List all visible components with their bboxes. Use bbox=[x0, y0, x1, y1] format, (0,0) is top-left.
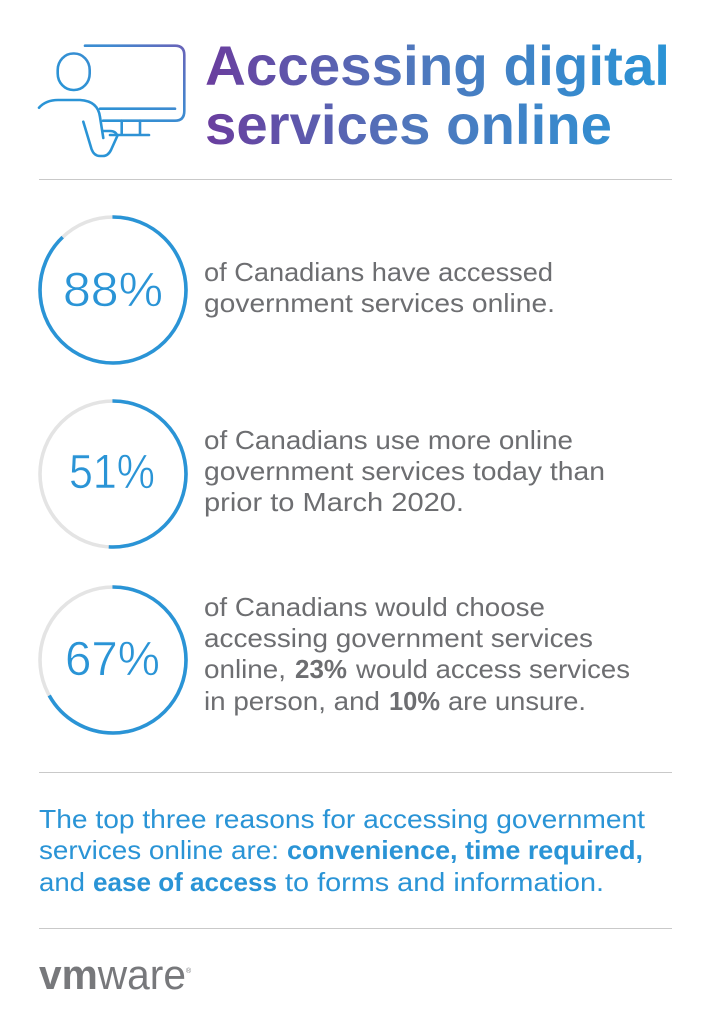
text: 67% description: 23% bbox=[295, 654, 347, 684]
text: top three reasons: services online are: bbox=[39, 835, 279, 865]
value: 67%: 67% bbox=[65, 633, 160, 686]
ring chart: 88% bbox=[40, 217, 186, 363]
stat: 67% bbox=[40, 587, 630, 733]
logo: vmware: vmware bbox=[39, 951, 186, 998]
text: 67% description: online, bbox=[204, 654, 286, 684]
text: 51% description: of Canadians use more online bbox=[204, 425, 573, 455]
text: 67% description: of Canadians would choose bbox=[204, 592, 545, 622]
text: 67% description: accessing government services bbox=[204, 623, 593, 653]
title: services online bbox=[205, 93, 612, 156]
text: 67% description: 10% bbox=[389, 686, 440, 716]
text: 67% description bbox=[204, 592, 630, 716]
text: 67% description: in person, and bbox=[204, 686, 380, 716]
text: 51% description: government services today than bbox=[204, 456, 605, 486]
stat: 88% bbox=[40, 217, 555, 363]
text: top three reasons: The top three reasons for accessing government bbox=[39, 804, 646, 834]
text: 67% description: would access services bbox=[355, 654, 630, 684]
text: top three reasons: and bbox=[39, 867, 85, 897]
ring chart: 51% bbox=[40, 401, 186, 547]
value: 51%: 51% bbox=[69, 446, 155, 499]
title: Accessing digital bbox=[205, 34, 670, 97]
icon: person at computer monitor bbox=[39, 46, 184, 156]
logo: vmware: ® bbox=[186, 967, 192, 975]
text: 88% description: of Canadians have accessed bbox=[204, 257, 553, 287]
ring chart: 67% bbox=[40, 587, 186, 733]
text: top three reasons: ease of access bbox=[93, 867, 277, 897]
text: top three reasons: to forms and information. bbox=[285, 867, 604, 897]
text: top three reasons: convenience, time required, bbox=[287, 835, 643, 865]
text: top three reasons bbox=[39, 804, 646, 897]
text: 88% description bbox=[204, 257, 555, 318]
value: 88%: 88% bbox=[63, 264, 163, 317]
title bbox=[205, 34, 670, 156]
text: 51% description bbox=[204, 425, 605, 517]
text: 67% description: are unsure. bbox=[448, 686, 586, 716]
stat: 51% bbox=[40, 401, 605, 547]
text: 88% description: government services online. bbox=[204, 288, 555, 318]
text: 51% description: prior to March 2020. bbox=[204, 487, 464, 517]
